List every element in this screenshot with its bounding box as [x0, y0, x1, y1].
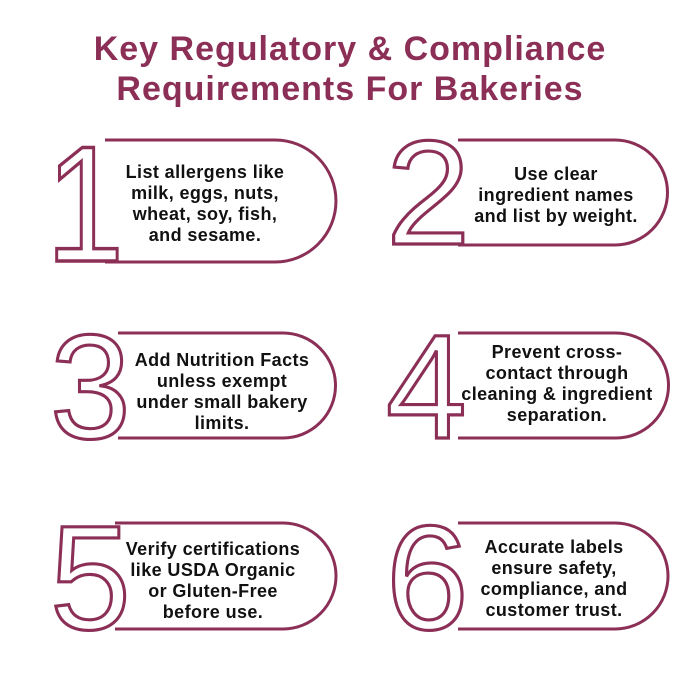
text 3: under small bakery [136, 392, 308, 412]
title: Requirements For Bakeries [116, 70, 584, 108]
text 2: ingredient names [478, 185, 634, 205]
pill 4 [458, 333, 668, 438]
text 1 [126, 162, 284, 245]
text 2: Use clear [514, 164, 598, 184]
text 3: limits. [195, 413, 249, 433]
text 3: Add Nutrition Facts [135, 350, 309, 370]
pill 3 [118, 333, 336, 438]
text 6: ensure safety, [491, 558, 617, 578]
text 4: Prevent cross- [492, 342, 622, 362]
pill 1 [105, 140, 336, 262]
text 2: and list by weight. [474, 206, 638, 226]
number 1: 1 [46, 112, 124, 297]
title [94, 30, 606, 108]
item 6 [386, 496, 668, 661]
text 3: unless exempt [157, 371, 287, 391]
item 1 [46, 112, 336, 297]
text 5: or Gluten-Free [148, 581, 278, 601]
item 3 [50, 305, 336, 470]
text 5: before use. [163, 602, 263, 622]
item 2 [386, 110, 668, 276]
number 2: 2 [386, 110, 470, 276]
text 6: customer trust. [485, 600, 623, 620]
text 5: Verify certifications [126, 539, 300, 559]
item 4 [386, 305, 668, 470]
text 1: List allergens like [126, 162, 284, 182]
text 4 [461, 342, 653, 425]
text 4: separation. [507, 405, 607, 425]
text 1: and sesame. [149, 225, 261, 245]
number 4: 4 [386, 305, 467, 470]
text 1: milk, eggs, nuts, [131, 183, 279, 203]
pill 6 [458, 523, 668, 629]
text 3 [135, 350, 309, 433]
item 5 [50, 496, 336, 661]
pill 2 [458, 140, 668, 245]
pill 5 [115, 523, 336, 629]
text 5: like USDA Organic [130, 560, 296, 580]
text 4: cleaning & ingredient [461, 384, 653, 404]
text 1: wheat, soy, fish, [132, 204, 277, 224]
text 6 [480, 537, 628, 620]
text 6: Accurate labels [484, 537, 624, 557]
title: Key Regulatory & Compliance [94, 30, 606, 68]
text 2 [474, 164, 638, 226]
text 6: compliance, and [480, 579, 628, 599]
number 3: 3 [50, 305, 131, 470]
number 6: 6 [386, 496, 469, 661]
text 4: contact through [486, 363, 628, 383]
text 5 [126, 539, 300, 622]
number 5: 5 [50, 496, 131, 661]
